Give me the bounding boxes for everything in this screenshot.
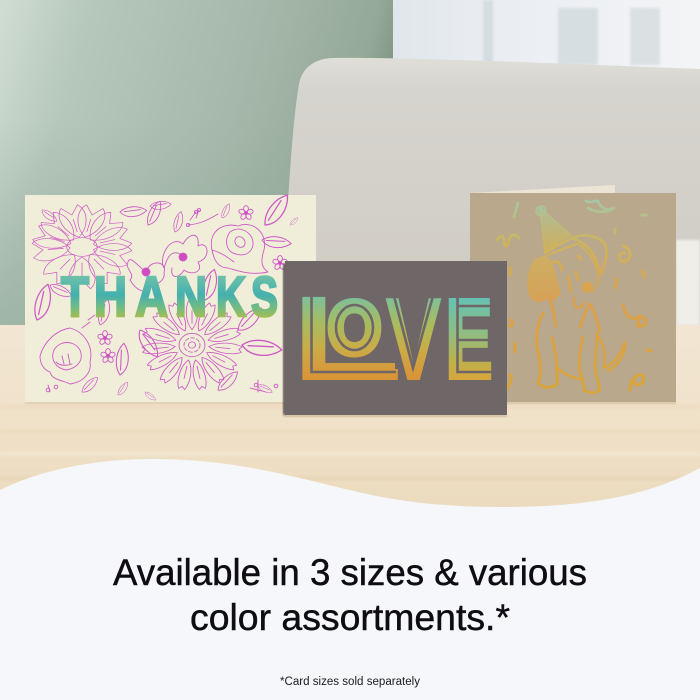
party hat	[540, 208, 571, 252]
heading: Available in 3 sizes & various	[113, 552, 587, 593]
sunflower	[142, 300, 242, 390]
stems and berries	[48, 210, 266, 392]
left ear	[528, 256, 560, 301]
THANKS lettering: S	[251, 265, 278, 329]
left leg	[536, 313, 557, 387]
chest and neck	[550, 297, 600, 332]
back flap of puppy card	[470, 185, 615, 194]
LOVE lettering: O	[328, 286, 381, 370]
white wave panel	[0, 459, 700, 700]
small flowers	[238, 206, 254, 220]
LOVE lettering: E	[446, 278, 492, 401]
THANKS lettering: N	[175, 265, 207, 329]
heading	[113, 552, 587, 638]
tail	[597, 335, 625, 371]
THANKS lettering	[61, 265, 278, 329]
card: birthday puppy	[470, 185, 676, 404]
card: LOVE	[283, 261, 507, 417]
LOVE card face	[285, 261, 507, 415]
LOVE inline stripes	[312, 296, 494, 372]
bottom-left rose	[40, 328, 91, 384]
right leg	[579, 333, 600, 392]
footnote: *Card sizes sold separately	[280, 676, 420, 688]
leaves	[40, 206, 58, 225]
background: sage green wall	[0, 0, 400, 330]
head and right ear	[545, 235, 607, 274]
confetti	[497, 201, 614, 246]
background: bright window with curtains	[393, 0, 700, 72]
top-right rose	[211, 224, 268, 273]
floral line art	[27, 193, 300, 403]
THANKS lettering: A	[135, 265, 168, 329]
background: grey linen sofa	[283, 58, 700, 330]
wooden table	[0, 325, 700, 515]
middle flowers with cores	[162, 235, 207, 277]
background: bright wall strip at right	[676, 240, 700, 326]
puppy illustration	[497, 201, 651, 392]
LOVE lettering: V	[385, 273, 442, 406]
card: floral THANKS	[25, 193, 316, 404]
top-left flower	[31, 204, 133, 289]
face features	[553, 256, 581, 292]
tongue	[574, 298, 584, 308]
LOVE lettering	[287, 273, 492, 406]
THANKS lettering: H	[94, 265, 127, 329]
puppy card face	[470, 193, 676, 402]
THANKS lettering: K	[216, 265, 246, 329]
heading: color assortments.*	[190, 597, 510, 638]
THANKS lettering: T	[61, 265, 89, 329]
LOVE lettering: L	[287, 273, 403, 405]
floral card face	[25, 195, 316, 402]
